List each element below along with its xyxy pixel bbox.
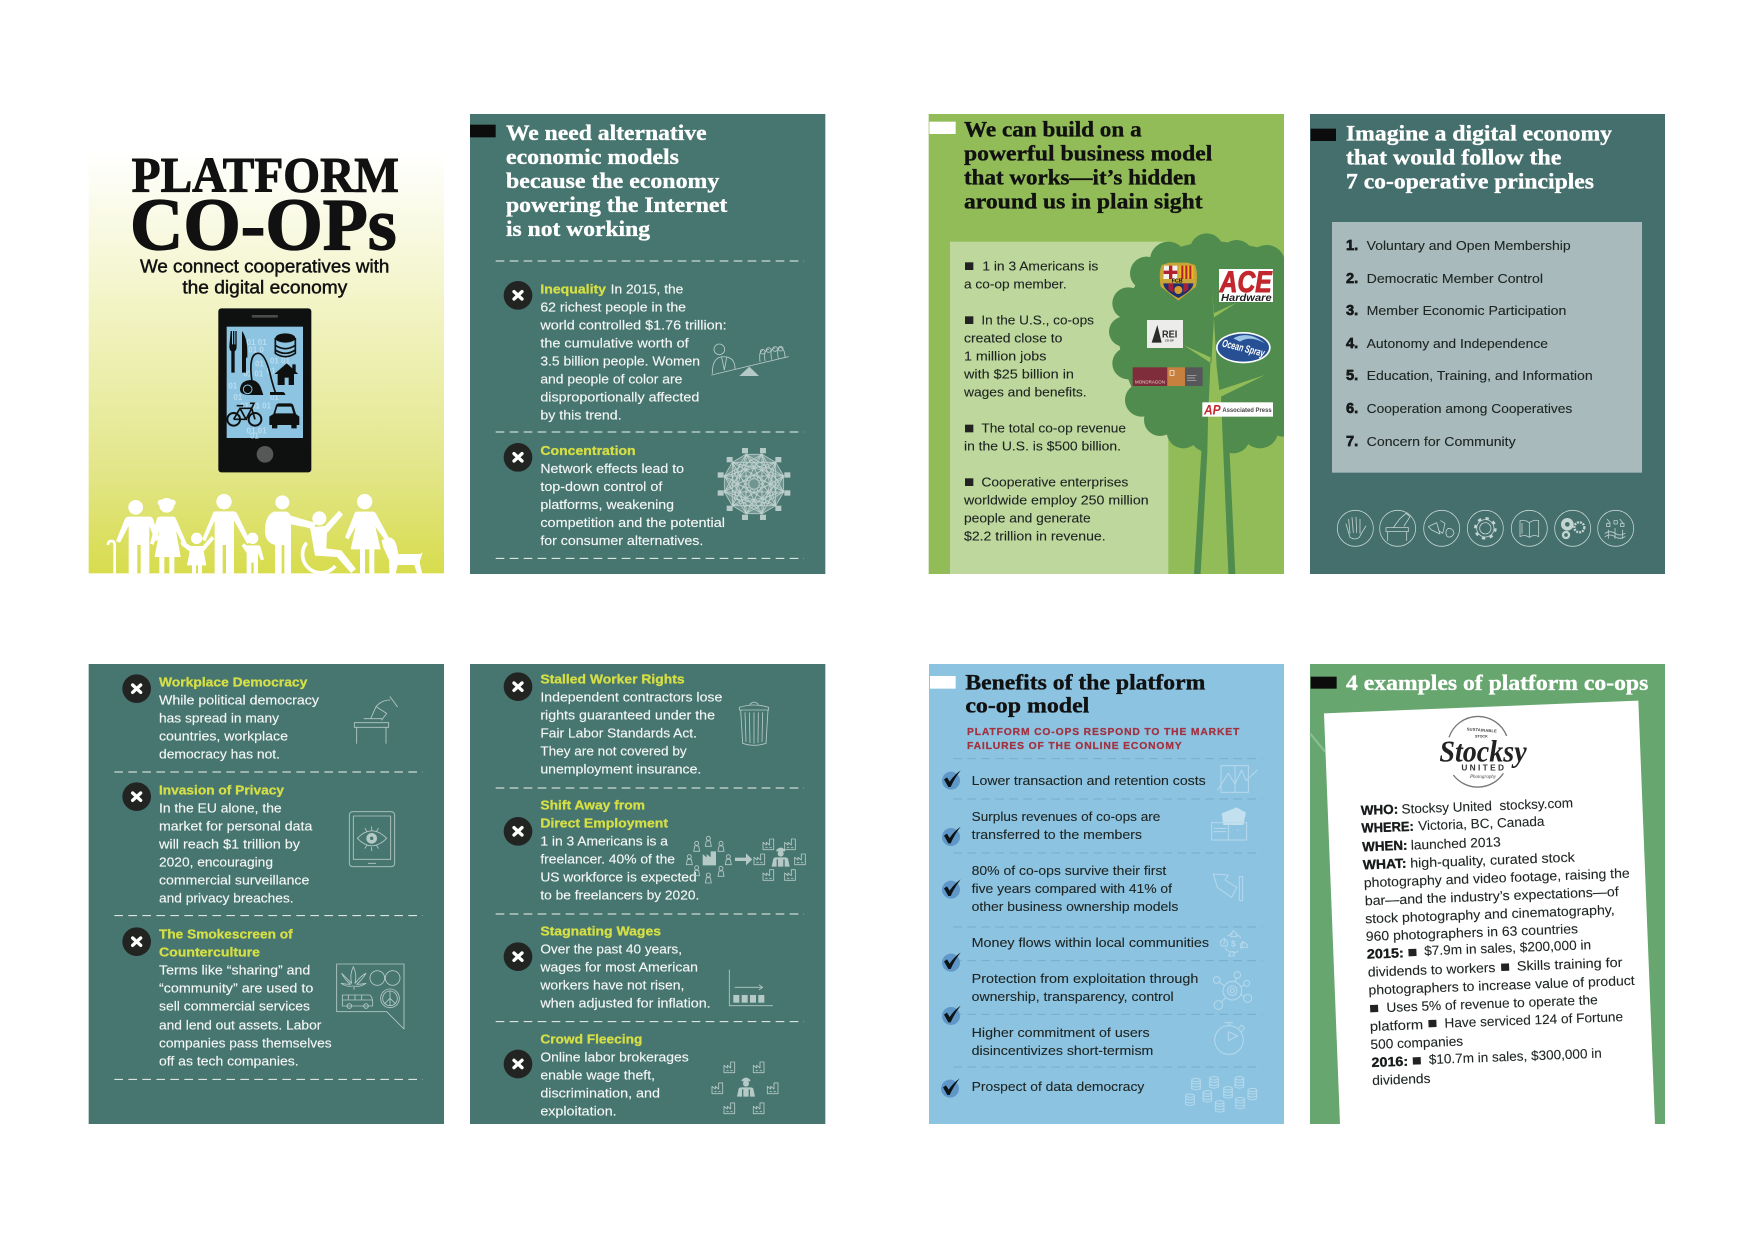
benefit: lower costs: Lower transaction and retention costs	[972, 773, 1206, 788]
logo: Stocksy United: Photography	[1469, 775, 1497, 780]
heading: We can build on a	[964, 117, 1142, 142]
icon: x mark	[122, 674, 151, 703]
heading: powerful business model	[964, 141, 1212, 166]
text: concentration	[540, 443, 725, 548]
icon: counterculture speech bubble	[337, 964, 404, 1029]
text: co-op facts: 1 million jobs	[964, 349, 1047, 364]
text: crowd fleecing: enable wage theft,	[540, 1068, 655, 1083]
text: crowd fleecing: discrimination, and	[540, 1086, 660, 1101]
icon: x mark	[504, 281, 532, 310]
logo: REI	[1147, 320, 1183, 348]
text: co-op facts: In the U.S., co-ops	[981, 313, 1094, 328]
heading	[1346, 121, 1613, 194]
text: Stocksy United details: bar—and the industry’s expectations—of	[1365, 884, 1619, 908]
text: concentration: Concentration	[540, 443, 636, 458]
text: Stocksy United details: Stocksy United stocksy.com	[1401, 795, 1573, 817]
text: shift away from direct employment: Shift Away from	[540, 798, 645, 813]
icons: seven principles	[1337, 510, 1634, 546]
text: co-op facts: wages and benefits.	[963, 385, 1087, 400]
panel: workplace democracy, privacy, counterculture	[89, 664, 444, 1124]
text: workplace democracy: democracy has not.	[159, 747, 280, 762]
icon: smartphone with services: 01	[233, 393, 243, 402]
text: co-op facts: a co-op member.	[964, 277, 1067, 292]
panel: four examples of platform co-ops	[1310, 664, 1665, 1124]
list box: principles: 1.	[1346, 238, 1358, 254]
panel: platform co-ops cover	[89, 114, 444, 580]
text: concentration: competition and the potential	[540, 515, 725, 530]
text: smokescreen of counterculture: off as tech companies.	[159, 1054, 299, 1069]
text: inequality: the cumulative worth of	[540, 335, 689, 350]
list box: principles: Democratic Member Control	[1367, 271, 1543, 286]
text: Stocksy United details: Victoria, BC, Canada	[1418, 814, 1545, 833]
list box: principles: Member Economic Participation	[1367, 303, 1566, 318]
icon: tablet with eye	[349, 812, 395, 867]
benefit: lower costs	[942, 766, 1257, 792]
list box: principles: Cooperation among Cooperatives	[1367, 401, 1573, 416]
text: inequality: 3.5 billion people. Women	[540, 353, 700, 368]
heading: that would follow the	[1346, 145, 1561, 170]
text: smokescreen of counterculture: Terms like “sharing” and	[159, 963, 310, 978]
text: stagnating wages: when adjusted for inflation.	[539, 996, 711, 1011]
text: Stocksy United details: Skills training for	[1517, 955, 1623, 974]
text: smokescreen of counterculture: Counterculture	[159, 945, 260, 960]
text: invasion of privacy: will reach $1 trillion by	[158, 837, 300, 852]
heading: that works—it’s hidden	[964, 165, 1196, 190]
text: Stocksy United details: WHERE:	[1361, 819, 1414, 836]
heading	[506, 120, 728, 241]
text: invasion of privacy	[158, 783, 313, 906]
text: Stocksy United details: 960 photographers in 63 countries	[1366, 921, 1579, 944]
heading: 4 examples of platform co-ops	[1346, 670, 1649, 695]
text: Stocksy United details: dividends to workers	[1368, 960, 1496, 980]
section marker	[470, 125, 496, 137]
subheading	[967, 727, 1240, 752]
text: Stocksy United details: WHEN:	[1362, 838, 1408, 854]
list box: principles: Voluntary and Open Membership	[1367, 238, 1571, 253]
icon: smartphone with services: 01	[255, 360, 264, 369]
heading: Imagine a digital economy	[1346, 121, 1613, 146]
text: Stocksy United details: $7.9m in sales, $200,000 in	[1424, 937, 1591, 958]
logo: Stocksy United	[1439, 716, 1527, 787]
text: stalled worker rights: Fair Labor Standards Act.	[540, 726, 697, 741]
text: concentration: platforms, weakening	[540, 497, 674, 512]
text: workplace democracy: countries, workplace	[159, 729, 288, 744]
text: shift away from direct employment: to be freelancers by 2020.	[540, 888, 699, 903]
icon: trash can	[739, 702, 769, 745]
subtitle	[140, 256, 389, 297]
logo: Ace Hardware: Hardware	[1221, 293, 1272, 304]
text: workplace democracy: Workplace Democracy	[159, 675, 308, 690]
facts background	[950, 242, 1168, 574]
text: smokescreen of counterculture	[159, 927, 332, 1069]
text: stalled worker rights	[540, 672, 722, 777]
panel: worker rights, employment, wages, fleecing	[470, 664, 825, 1124]
text: concentration: Network effects lead to	[540, 461, 684, 476]
icon: worker and factories	[712, 1062, 778, 1114]
benefit: higher commitment	[972, 1023, 1245, 1058]
logo: FC Barcelona: FCB	[1172, 279, 1183, 285]
text: crowd fleecing	[540, 1032, 689, 1119]
text: co-op facts: with $25 billion in	[963, 367, 1074, 382]
heading: economic models	[506, 144, 679, 169]
text: smokescreen of counterculture: sell commercial services	[159, 999, 310, 1014]
text: Stocksy United details: 2015:	[1367, 945, 1404, 962]
text: Stocksy United details: WHO:	[1361, 802, 1398, 818]
text: stalled worker rights: They are not covered by	[540, 744, 687, 759]
list box: principles: 5.	[1346, 368, 1358, 384]
text: Stocksy United details: $10.7m in sales, $300,000 in	[1429, 1046, 1602, 1067]
text: stalled worker rights: rights guaranteed under the	[540, 708, 715, 723]
logo: Ocean Spray: Ocean Spray	[1221, 338, 1266, 360]
heading: co-op model	[965, 693, 1089, 718]
text: Stocksy United details: photographers to increase value of product	[1368, 973, 1635, 998]
text: invasion of privacy: market for personal data	[159, 819, 313, 834]
text: invasion of privacy: Invasion of Privacy	[159, 783, 285, 798]
list box: principles: 3.	[1346, 303, 1358, 319]
text: co-op facts: people and generate	[964, 511, 1091, 526]
icon: seesaw inequality	[712, 344, 788, 376]
panel: business model tree	[929, 114, 1303, 574]
subheading: FAILURES OF THE ONLINE ECONOMY	[967, 741, 1182, 752]
text: shift away from direct employment: 1 in 3 Americans is a	[540, 834, 669, 849]
benefit: data democracy	[941, 1077, 1257, 1112]
text: stalled worker rights: Stalled Worker Rights	[540, 672, 685, 687]
text: Stocksy United details: 2016:	[1371, 1054, 1408, 1070]
logo: Associated Press: Associated Press	[1222, 407, 1272, 414]
text: stagnating wages	[539, 924, 711, 1011]
logo: Mondragon	[1133, 367, 1203, 386]
text: Stocksy United details: dividends	[1372, 1071, 1431, 1088]
text: Stocksy United details: high-quality, curated stock	[1410, 850, 1575, 871]
heading: powering the Internet	[506, 192, 728, 217]
logo: Associated Press: AP	[1203, 402, 1221, 418]
text: smokescreen of counterculture: companies pass themselves	[159, 1036, 332, 1051]
text: crowd fleecing: exploitation.	[540, 1104, 617, 1119]
panel: alternative economic models	[470, 114, 825, 574]
text: shift away from direct employment	[540, 798, 699, 903]
icon: smartphone with services: 01 01	[243, 370, 264, 379]
text: Stocksy United details: launched 2013	[1411, 834, 1501, 853]
text: inequality: 62 richest people in the	[540, 299, 686, 314]
text: stalled worker rights: unemployment insurance.	[540, 762, 701, 777]
benefit: local money: Money flows within local communities	[972, 935, 1209, 950]
icon: smartphone with services: 01	[267, 366, 276, 375]
text: inequality: world controlled $1.76 trillion:	[539, 317, 727, 332]
text: invasion of privacy: In the EU alone, the	[159, 801, 282, 816]
text: Stocksy United details: Have serviced 124 of Fortune	[1444, 1009, 1623, 1031]
list box: principles: 2.	[1346, 271, 1358, 287]
title	[130, 147, 399, 266]
text: inequality	[539, 281, 727, 422]
subtitle: the digital economy	[182, 276, 348, 297]
text: co-op facts	[963, 259, 1149, 544]
text: Stocksy United details: WHAT:	[1363, 856, 1407, 872]
benefit: surplus revenues: transferred to the members	[972, 827, 1142, 842]
icon: smartphone with services	[218, 308, 311, 472]
text: Stocksy United details: platform	[1370, 1017, 1423, 1034]
heading: 7 co-operative principles	[1346, 169, 1594, 194]
text: crowd fleecing: Online labor brokerages	[540, 1050, 689, 1065]
text: co-op facts: worldwide employ 250 million	[963, 493, 1149, 508]
text: stagnating wages: Stagnating Wages	[540, 924, 661, 939]
section marker	[1311, 677, 1337, 689]
text: shift away from direct employment: Direct Employment	[540, 816, 669, 831]
benefit: survival rate: five years compared with 41% of	[972, 881, 1172, 896]
logo: Mondragon: MONDRAGON	[1135, 379, 1165, 384]
text: stagnating wages: wages for most American	[539, 960, 698, 975]
logo: REI: REI	[1162, 330, 1178, 341]
section marker	[929, 122, 956, 134]
benefit: protection	[942, 971, 1252, 1025]
subtitle: We connect cooperatives with	[140, 256, 389, 277]
text: Stocksy United details: 500 companies	[1370, 1034, 1464, 1052]
benefit: surplus revenues: Surplus revenues of co-ops are	[972, 809, 1160, 824]
icon: smartphone with services: 01 01	[270, 356, 291, 365]
text: crowd fleecing: Crowd Fleecing	[540, 1032, 642, 1047]
heading	[964, 117, 1212, 214]
text: invasion of privacy: 2020, encouraging	[159, 855, 273, 870]
panel: seven co-operative principles	[1310, 114, 1665, 574]
icon: flat wages chart	[729, 970, 773, 1006]
text: workplace democracy: While political democracy	[159, 693, 319, 708]
subheading: PLATFORM CO-OPS RESPOND TO THE MARKET	[967, 727, 1240, 738]
text: stagnating wages: workers have not risen,	[539, 978, 684, 993]
text: inequality: and people of color are	[540, 371, 682, 386]
icon: smartphone with services: 01	[270, 393, 279, 402]
benefit: data democracy: Prospect of data democracy	[972, 1079, 1145, 1094]
logo: Associated Press	[1202, 402, 1273, 418]
logo: Stocksy United: STOCK	[1475, 734, 1488, 738]
text: concentration: top-down control of	[540, 479, 663, 494]
text: Stocksy United details: stock photography and cinematography,	[1365, 902, 1615, 926]
text: invasion of privacy: and privacy breaches.	[159, 891, 294, 906]
text: shift away from direct employment: US workforce is expected	[540, 870, 697, 885]
icon: x mark	[122, 782, 151, 811]
heading: around us in plain sight	[964, 189, 1203, 214]
benefit: protection: Protection from exploitation through	[972, 971, 1198, 986]
benefit: higher commitment: Higher commitment of users	[972, 1025, 1150, 1040]
text: inequality: Inequality	[540, 281, 607, 296]
text: invasion of privacy: commercial surveillance	[159, 873, 309, 888]
section marker	[930, 676, 956, 689]
section marker	[1311, 129, 1336, 141]
logo: Stocksy United: Stocksy	[1439, 735, 1527, 769]
text: co-op facts: Cooperative enterprises	[981, 475, 1129, 490]
icon: community of people	[108, 494, 424, 580]
logo: Stocksy United: UNITED	[1461, 763, 1504, 773]
text: shift away from direct employment: freelancer. 40% of the	[540, 852, 675, 867]
list box: principles: 7.	[1346, 434, 1358, 450]
icon: x mark	[504, 817, 532, 846]
icon: employees to freelancers	[686, 836, 805, 883]
list box: principles: Education, Training, and Information	[1367, 368, 1593, 383]
text: inequality: by this trend.	[540, 407, 622, 422]
panel: benefits of the platform co-op model	[929, 664, 1284, 1124]
icon: smartphone with services: 01 01	[247, 338, 267, 347]
text: workplace democracy: has spread in many	[159, 711, 279, 726]
text: smokescreen of counterculture: The Smokescreen of	[159, 927, 293, 942]
logo: FC Barcelona	[1160, 263, 1197, 301]
text: stalled worker rights: Independent contractors lose	[540, 690, 722, 705]
benefit: surplus revenues	[942, 807, 1247, 846]
icon: ballot box	[354, 697, 397, 743]
text: concentration: for consumer alternatives.	[540, 533, 703, 548]
benefit: local money: $	[1231, 939, 1236, 949]
card	[1324, 701, 1655, 1124]
icon: smartphone with services: 01 01 01	[240, 401, 272, 410]
list box: principles: 6.	[1346, 401, 1358, 417]
heading: Benefits of the platform	[965, 669, 1205, 694]
text: co-op facts: The total co-op revenue	[981, 421, 1126, 436]
icon: x mark	[504, 1050, 532, 1078]
heading: is not working	[506, 216, 651, 241]
illustration: tree	[1109, 233, 1303, 574]
text: Stocksy United details: Uses 5% of revenue to operate the	[1386, 992, 1598, 1015]
list box: principles: Concern for Community	[1367, 434, 1516, 449]
benefit: protection: ownership, transparency, control	[972, 989, 1174, 1004]
list box: principles: Autonomy and Independence	[1367, 336, 1548, 351]
text: stagnating wages: Over the past 40 years,	[540, 942, 682, 957]
logo: Stocksy United: SUSTAINABLE	[1467, 726, 1497, 734]
icon: smartphone with services: 01	[250, 431, 259, 440]
benefit: higher commitment: disincentivizes short-termism	[972, 1043, 1153, 1058]
logo: REI: CO-OP	[1165, 339, 1174, 343]
icon: smartphone with services: 01 01	[247, 426, 267, 435]
heading	[965, 669, 1205, 718]
text: Stocksy United details: photography and video footage, raising the	[1364, 866, 1630, 890]
text: co-op facts: in the U.S. is $500 billion.	[964, 439, 1121, 454]
text: co-op facts: 1 in 3 Americans is	[982, 259, 1099, 274]
heading: We need alternative	[506, 120, 707, 145]
icon: x mark	[504, 942, 532, 971]
text: smokescreen of counterculture: and lend out assets. Labor	[159, 1018, 322, 1033]
text: smokescreen of counterculture: “community” are used to	[159, 981, 313, 996]
list box: principles: 4.	[1346, 336, 1358, 352]
benefit: survival rate: 80% of co-ops survive their first	[972, 863, 1167, 878]
icon: x mark	[504, 672, 532, 701]
title: PLATFORM	[132, 147, 399, 203]
benefit: local money	[942, 931, 1247, 972]
benefit: survival rate: other business ownership models	[972, 899, 1179, 914]
logo: Ace Hardware: ACE	[1219, 266, 1273, 299]
text: co-op facts: created close to	[964, 331, 1062, 346]
list box: principles	[1332, 222, 1642, 473]
text: co-op facts: $2.2 trillion in revenue.	[964, 529, 1106, 544]
icon: smartphone with services: 01	[228, 381, 238, 390]
text: workplace democracy	[159, 675, 319, 762]
icon: network mandala	[718, 448, 790, 520]
benefit: survival rate	[942, 863, 1243, 914]
icon: x mark	[122, 927, 151, 956]
title: CO-OPs	[130, 184, 397, 266]
text: inequality: disproportionally affected	[540, 389, 699, 404]
icon: smartphone with services: 01 0	[248, 346, 264, 355]
logo: Ocean Spray	[1216, 332, 1271, 363]
icon: x mark	[504, 443, 532, 472]
text: Stocksy United details	[1361, 795, 1635, 1088]
text: inequality: In 2015, the	[611, 281, 683, 296]
heading: because the economy	[506, 168, 720, 193]
